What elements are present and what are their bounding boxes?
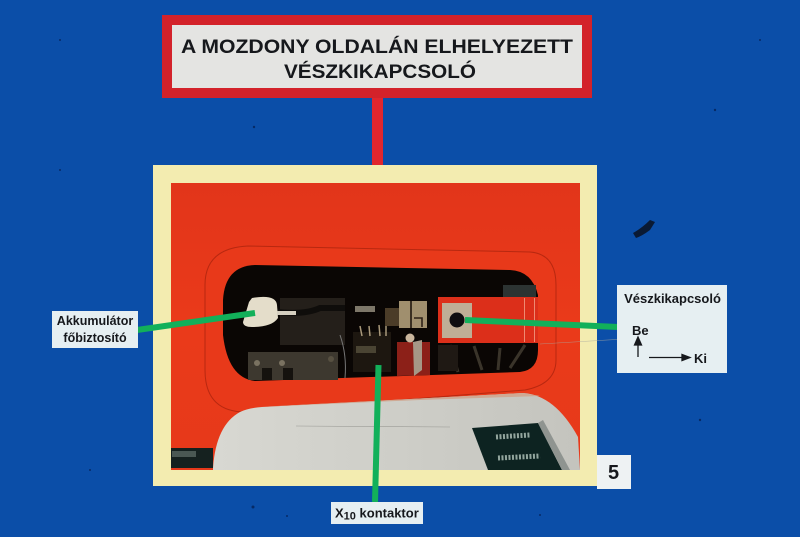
leader line: contactor xyxy=(375,365,378,502)
cream mat xyxy=(153,165,597,486)
leader line: fuse xyxy=(137,313,255,330)
vent at back xyxy=(503,285,536,297)
recess outline xyxy=(205,246,556,412)
label: emergency switch with directions: Be xyxy=(632,323,649,338)
page number box xyxy=(597,455,631,489)
photo panel xyxy=(153,165,726,486)
hairline scratch xyxy=(296,426,450,427)
red connector post xyxy=(372,98,383,166)
label: emergency switch with directions: Ki xyxy=(694,351,707,366)
arrow: up xyxy=(634,337,642,357)
red relay xyxy=(397,342,430,376)
label: main fuse: főbiztosító xyxy=(63,331,127,345)
label: emergency switch with directions: Vészkikapcsoló xyxy=(624,291,721,306)
arrow: right xyxy=(649,354,690,360)
label: X10 contactor: 10 xyxy=(344,510,356,522)
icon: rotary knob xyxy=(450,312,464,328)
label: X10 contactor: X xyxy=(335,506,344,520)
lower white cabinet xyxy=(213,393,580,470)
emergency switch plate xyxy=(438,297,538,343)
label: X10 contactor: kontaktor xyxy=(356,506,419,520)
lower-left metal block xyxy=(248,352,338,380)
label: main fuse xyxy=(52,311,138,348)
title: A MOZDONY OLDALÁN ELHELYEZETT xyxy=(181,36,573,58)
right wires xyxy=(450,345,525,372)
label: X10 contactor xyxy=(331,502,423,524)
leader line: switch xyxy=(465,320,618,327)
icon: main fuse xyxy=(243,297,278,327)
display window xyxy=(472,423,562,470)
title sign xyxy=(162,15,592,98)
label: emergency switch with directions xyxy=(617,285,727,373)
cable and bracket xyxy=(280,298,345,345)
dark opening xyxy=(223,265,538,381)
photo: red locomotive side xyxy=(171,183,580,470)
background specks xyxy=(59,39,761,517)
relay box xyxy=(399,301,427,328)
contactor xyxy=(353,332,391,372)
machinery group xyxy=(248,285,536,380)
label: main fuse: Akkumulátor xyxy=(57,314,133,328)
number 5: 5 xyxy=(608,462,619,484)
title sign: VÉSZKIKAPCSOLÓ xyxy=(284,61,476,83)
dark lower-left corner xyxy=(171,448,213,468)
